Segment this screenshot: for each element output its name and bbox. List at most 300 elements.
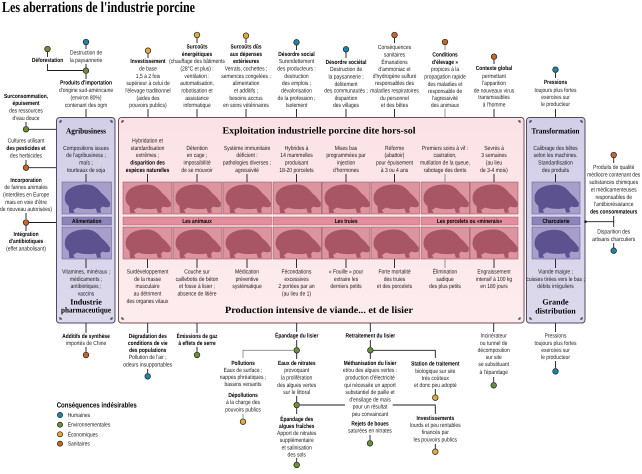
- illustration: pig, pharma: [62, 227, 112, 259]
- top: Contexte global: l'apparition: [482, 80, 506, 87]
- left: Surconsommation: épuisement: [12, 100, 40, 107]
- bottom: Investissements: Investissements: [416, 415, 455, 422]
- left: Intégration: d'antibiotiques: [9, 238, 44, 245]
- left: Incorporation: (interdites en Europe: [3, 192, 50, 198]
- top: Surcoûts dépenses extérieures: extérieures: [233, 58, 260, 65]
- right: Produits de qualité: Produits de qualité: [593, 164, 635, 171]
- pig row 2: [123, 227, 518, 259]
- top: Investissement: Investissement: [130, 58, 166, 65]
- top: Surcoûts énergétiques: ventilation :: [184, 73, 210, 80]
- bottom captions: Engraissement: [477, 268, 511, 276]
- top: Déforestation: Déforestation: [32, 57, 63, 64]
- bottom: Dégradation: des populations: [129, 347, 167, 354]
- panel: Exploitation industrielle: [118, 118, 524, 323]
- bottom: Eaux de nitrates: sur le littoral: [283, 389, 310, 396]
- top: Désordre sociétal: disparition: [335, 95, 357, 102]
- top: Désordre social: Surendettement: [279, 58, 315, 65]
- bottom: Épandage des algues: Apport de nitrates: [277, 430, 316, 437]
- bottom captions: des organes vitaux: [127, 298, 168, 305]
- bottom captions: absence de litière: [178, 290, 217, 298]
- bands: Les truies: [335, 218, 358, 225]
- bottom: Station de traitement: et donc peu adopté: [414, 382, 457, 389]
- top: Désordre social: de la profession ;: [278, 95, 316, 102]
- top: Surcoûts énergétiques: [169, 32, 225, 117]
- left: Incorporation: de nouveau autorisées): [0, 206, 52, 213]
- top: Contexte global: [474, 54, 514, 117]
- bottom: Méthanisation: et/ou des algues vertes :: [343, 367, 397, 374]
- top: Investissement: de base: [139, 66, 157, 72]
- bottom captions: caillebotis de béton: [176, 276, 218, 283]
- top captions: agressivité: [235, 167, 260, 174]
- bottom: Méthanisation: Méthanisation du lisier: [344, 360, 397, 367]
- top captions: en cage ;: [187, 153, 208, 159]
- heading: Exploitation: Exploitation industrielle porcine dite hors-sol: [222, 126, 416, 136]
- top captions: (abattoir): [385, 152, 404, 159]
- bottom: Pressions: toujours plus fortes: [534, 340, 577, 347]
- top captions: impossibilité: [183, 160, 211, 166]
- heading: Industrie pharmaceutique: pharmaceutique: [61, 306, 111, 314]
- text: viande maigre: Viande maigre ;: [538, 268, 573, 276]
- bottom: Dégradation: [123, 323, 172, 379]
- top captions: espèces naturelles: [126, 167, 170, 174]
- bottom: Méthanisation: substantiel de paille et: [345, 389, 395, 396]
- text: compositions: de l'agribusiness ;: [66, 152, 106, 159]
- text: viande maigre: débits irréguliers: [537, 283, 574, 290]
- bottom captions: intensif à 100 kg: [476, 276, 512, 283]
- panel: Transformation: [526, 118, 585, 323]
- top captions: (au lieu: [486, 160, 502, 166]
- bottom: Pollutions: [220, 360, 267, 425]
- top: Investissement: l'élevage traditionnel: [125, 88, 171, 94]
- right: Produits de qualité: des consommateurs: [590, 208, 638, 216]
- text: compositions: Compositions issues: [63, 145, 109, 152]
- top captions: mutilation de la queue,: [420, 160, 470, 166]
- top captions: standardisation: [131, 145, 164, 152]
- right: Produits de qualité: [584, 152, 640, 227]
- bands: [123, 217, 518, 225]
- bottom: Émissions: [177, 323, 217, 358]
- legend title: Conséquences indésirables: [57, 400, 137, 410]
- top: Conséquences sanitaires: maladies respiratoires: [370, 88, 419, 94]
- top: Désordre social: des producteurs :: [277, 66, 316, 72]
- top captions: à 3 ou 4 ans: [381, 167, 408, 174]
- text: calibrage: Standardisation: [538, 160, 573, 166]
- top captions: Hybrides à: [285, 145, 309, 152]
- top captions: de 3-4 mois): [480, 167, 508, 174]
- right: Produits de qualité: l'antibiorésistance: [594, 201, 634, 208]
- right: Disparition des artisans: artisans charcutiers: [592, 236, 635, 243]
- bottom: Émissions: Émissions de gaz: [177, 332, 217, 340]
- bottom: Retraitement du lisier: [346, 323, 435, 359]
- right: Produits de qualité: médiocre contenant des: [587, 172, 640, 178]
- top: Déforestation: [32, 46, 83, 70]
- bottom: Eaux de nitrates: provoquant: [284, 368, 309, 374]
- bottom captions: de la masse: [134, 276, 162, 283]
- bottom: Eaux de nitrates: la prolifération: [281, 374, 312, 382]
- illustration: pig, feed: [62, 182, 112, 214]
- bottom: Incinérateur: sur site: [486, 354, 502, 361]
- text: calibrage: des produits: [542, 167, 569, 174]
- right: Produits de qualité: responsables de: [595, 194, 633, 201]
- top: Investissement: [125, 48, 171, 117]
- top: Investissement: 1,5 à 2 fois: [136, 73, 160, 80]
- top: Surcoûts énergétiques: énergétiques: [182, 51, 213, 58]
- top: Désordre sociétal: Destruction de: [330, 66, 363, 73]
- heading: Industrie pharmaceutique: [61, 298, 111, 314]
- heading: Grande distribution: [535, 298, 576, 316]
- bottom: Pollutions: pouvoirs publics: [225, 406, 261, 414]
- right: Disparition des artisans: [592, 228, 635, 254]
- left: Intégration: Intégration: [13, 231, 39, 238]
- top: Produits d'importation: (environ 80%): [70, 94, 102, 102]
- top: Surcoûts dépenses extérieures: en soins vétérinaires: [223, 102, 269, 109]
- left: Intégration: (effet anabolisant): [6, 246, 46, 252]
- left: Surconsommation: d'eau douce: [13, 115, 40, 122]
- bottom: Méthanisation: saturées en nitrates: [348, 428, 392, 434]
- top captions: Réforme: [385, 145, 405, 152]
- bottom: Eaux de nitrates: des algues vertes: [277, 382, 316, 389]
- top captions: de se mouvoir: [181, 167, 213, 174]
- bottom: Eaux de nitrates: [277, 360, 345, 414]
- left: Incorporation: [0, 177, 56, 231]
- right: Produits de qualité: et médicamenteuses: [591, 186, 637, 194]
- text: calibrage: selon les machines.: [534, 152, 578, 159]
- top captions: injection: [337, 160, 355, 166]
- band: Alimentation: Alimentation: [72, 218, 102, 225]
- left: Intégration: [6, 231, 46, 252]
- bottom: Incinérateur: Incinérateur: [481, 332, 507, 340]
- bottom: Station de traitement: très coûteux: [422, 375, 449, 382]
- left: Surconsommation: des ressources: [9, 108, 43, 114]
- top: Destruction de la paysannerie: la paysannerie: [70, 57, 103, 64]
- bottom: Investissements: financés par: [422, 429, 449, 436]
- top: Conditions d'élevage: des maladies et: [428, 81, 463, 88]
- bands: Les porcelets ou «minerais»: [437, 218, 503, 225]
- top captions: 18-20 porcelets: [279, 167, 314, 174]
- top: Conséquences sanitaires: [370, 32, 419, 117]
- left: Incorporation: mais en voie d'être: [5, 199, 47, 206]
- bottom: Investissements: les pouvoirs publics: [414, 436, 457, 444]
- text: viande maigre: [526, 268, 585, 290]
- top: Pressions: toujours plus fortes: [534, 87, 577, 94]
- top: Pressions: le producteur: [541, 101, 570, 108]
- top: Produits d'importation: d'origine sud-américaine: [59, 87, 114, 94]
- text: viande maigre: cuisses tirées vers le bas ;: [526, 276, 585, 283]
- bottom: Épandage des algues: des sols: [288, 452, 306, 458]
- top: Destruction de la paysannerie: Destruction de: [70, 50, 103, 56]
- bottom captions: en 180 jours: [480, 283, 508, 290]
- top: Produits d'importation: [59, 68, 114, 117]
- bottom: Incinérateur: à l'épandage: [480, 369, 508, 376]
- top: Surcoûts énergétiques: informatique: [183, 102, 211, 109]
- bottom captions: extraire les: [334, 276, 358, 283]
- bottom: Station de traitement: biologique sur site: [415, 368, 456, 375]
- top: Conséquences sanitaires: responsables des: [375, 80, 414, 87]
- top: Pressions: [534, 67, 577, 117]
- top: Investissement: supérieur à celui de: [126, 80, 170, 87]
- bottom: Pollutions: bassins versants: [224, 381, 262, 388]
- bottom captions: préventive: [236, 276, 259, 283]
- band: Charcuterie: [532, 217, 580, 225]
- top captions: Détention: [186, 145, 208, 152]
- top: Contexte global: transmissibles: [478, 94, 510, 101]
- bottom captions: Fécondations: [282, 268, 311, 276]
- title: Les aberrations de l'industrie porcine: [2, 0, 195, 16]
- top: Désordre sociétal: des communautés ;: [324, 88, 368, 94]
- text: compositions: [63, 145, 109, 174]
- band: Alimentation: [62, 217, 112, 225]
- bottom: Incinérateur: [478, 323, 510, 388]
- top: Surcoûts énergétiques: robotisation et: [181, 88, 213, 94]
- bottom: Méthanisation: Rejets de boues: [351, 420, 389, 428]
- top: Conséquences sanitaires: Émanations: [381, 58, 408, 66]
- bottom: Méthanisation: qui nécessite un apport: [344, 382, 396, 389]
- top captions: Premiers soins à vif :: [422, 145, 468, 152]
- top: Conséquences sanitaires: sanitaires: [384, 52, 405, 58]
- bottom: Pressions: le producteur: [541, 354, 570, 361]
- bottom: Pollutions: Dépollutions: [228, 392, 258, 399]
- left: Cultures: Cultures utilisant: [8, 138, 45, 144]
- legend: Sanitaires: Sanitaires: [68, 441, 90, 448]
- top: Surcoûts dépenses extérieures: [221, 33, 271, 117]
- top captions: disparition des: [130, 160, 165, 166]
- bottom: Incinérateur: ou tunnel de: [480, 340, 508, 347]
- bottom: Épandage des algues: algues fraîches: [279, 423, 315, 430]
- top: Surcoûts dépenses extérieures: Surcoûts dûs: [231, 44, 262, 50]
- top: Pressions: Pressions: [544, 79, 568, 86]
- bands: Les animaux: [182, 218, 212, 225]
- bottom: Investissements: [393, 405, 461, 455]
- panel: Agribusiness: [56, 118, 115, 323]
- text: compositions: maïs ;: [79, 160, 93, 166]
- top: Conditions d'élevage: d'élevage »: [432, 59, 459, 66]
- top: Produits d'importation: Produits d'importation: [60, 80, 112, 86]
- top: Conséquences sanitaires: du personnel: [380, 95, 409, 102]
- bottom: Eaux de nitrates: Eaux de nitrates: [278, 360, 316, 367]
- top captions: Sevrés à: [484, 145, 504, 152]
- bottom captions: [127, 268, 512, 305]
- top captions: 3 semaines: [481, 152, 507, 159]
- top: Surcoûts dépenses extérieures: alimentation: [233, 80, 259, 87]
- bottom captions: derniers petits: [330, 283, 362, 290]
- top: Investissement: (aides des: [137, 95, 159, 102]
- bottom: Pollutions: nappes phréatiques ;: [220, 374, 267, 381]
- top: Désordre sociétal: la paysannerie ;: [328, 74, 364, 80]
- top: Surcoûts dépenses extérieures: Verrats, cochettes ;: [225, 66, 268, 72]
- bottom: Pollutions: à la charge des: [226, 399, 260, 406]
- text: pharma inputs: médicaments ;: [70, 276, 102, 283]
- top captions: produisant: [285, 160, 308, 166]
- top: Désordre sociétal: délitement: [335, 81, 358, 88]
- left: Surconsommation: Surconsommation,: [4, 93, 48, 100]
- top: Produits d'importation: contenant des ogm: [65, 102, 107, 109]
- text: pharma inputs: [62, 268, 110, 298]
- top: Surcoûts dépenses extérieures: et additifs ;: [234, 88, 258, 94]
- pig row 1: [123, 182, 518, 214]
- bottom captions: des truies: [384, 276, 405, 283]
- top: Désordre social: des emplois ;: [282, 80, 311, 87]
- text: pharma inputs: antibiotiques ;: [71, 283, 102, 290]
- top: Surcoûts énergétiques: assistance: [185, 95, 209, 102]
- illustration: pig, retail: [532, 227, 580, 259]
- top captions: [126, 138, 508, 174]
- bottom captions: Forte mortalité: [379, 268, 411, 276]
- bottom: Pressions: Pressions: [545, 332, 566, 340]
- bottom: Additifs: Additifs de synthèse: [62, 333, 110, 340]
- top: Investissement: pouvoirs publics): [129, 102, 167, 109]
- bottom: Dégradation: odeurs insupportables: [123, 362, 172, 368]
- left: Cultures: des herbicides: [10, 152, 42, 160]
- top: Conséquences sanitaires: et des bêtes: [381, 102, 408, 109]
- bottom captions: au détriment: [134, 290, 162, 298]
- bottom captions: Élimination: [433, 268, 457, 276]
- right: Produits de qualité: substances chimiques: [589, 179, 638, 186]
- top captions: programmées par: [326, 152, 366, 159]
- bottom: Épandage du lisier: Épandage du lisier: [275, 332, 319, 340]
- top: Conditions d'élevage: [424, 39, 466, 117]
- bottom: Investissements: lourds et peu rentables: [410, 422, 461, 429]
- legend: Économiques: Économiques: [68, 430, 98, 438]
- top captions: Système immunitaire: [224, 145, 271, 152]
- top: Désordre sociétal: [324, 46, 368, 117]
- top: Désordre social: [277, 40, 316, 117]
- bottom: Épandage des algues: supplémentaire: [280, 437, 314, 444]
- bottom captions: « Fouille » pour: [329, 268, 363, 276]
- top: Conditions d'élevage: Conditions: [432, 52, 458, 58]
- left: Cultures: [6, 138, 56, 170]
- bottom captions: Couche sur: [184, 268, 210, 276]
- top: Conditions d'élevage: propagation rapide: [424, 74, 466, 80]
- bottom: Épandage des algues: [277, 415, 316, 468]
- top captions: pathologies diverses ;: [223, 160, 271, 166]
- bottom: Station de traitement: [411, 360, 459, 401]
- bottom captions: excessives: [284, 276, 309, 283]
- bottom: Additifs: [62, 323, 110, 358]
- legend: Humaines: Humaines: [68, 412, 90, 419]
- top: Conditions d'élevage: propices à la: [431, 66, 460, 73]
- top: Surcoûts énergétiques: automatisation,: [180, 80, 214, 87]
- top: Surcoûts énergétiques: Surcoûts: [187, 44, 208, 50]
- top: Conséquences sanitaires: d'hydrogène sulfuré: [373, 73, 417, 80]
- top captions: pour épuisement: [376, 160, 413, 166]
- top: Conditions d'élevage: l'agressivité: [432, 95, 459, 102]
- top: Surcoûts énergétiques: (28°C et plus) :: [180, 66, 214, 72]
- top: Conditions d'élevage: des animaux: [431, 102, 459, 109]
- text: pharma inputs: vaccins: [78, 290, 94, 298]
- legend: Environnementales: Environnementales: [68, 422, 110, 429]
- top captions: extrêmes ;: [136, 152, 159, 159]
- bottom: Pressions: [534, 323, 577, 374]
- top: Contexte global: permettant: [482, 74, 506, 80]
- bottom captions: et fosse à lisier ;: [179, 283, 215, 290]
- bottom captions: et des porcelets: [377, 283, 412, 290]
- heading: Agribusiness: Agribusiness: [66, 126, 106, 136]
- top: Désordre social: dévalorisation: [281, 88, 312, 94]
- top: Désordre sociétal: des villages: [333, 102, 359, 109]
- band: Charcuterie: Charcuterie: [543, 218, 570, 225]
- bottom: Méthanisation: [343, 360, 397, 446]
- bottom: Méthanisation: d'ensilage de maïs: [349, 396, 391, 404]
- bottom: Dégradation: Dégradation des: [129, 333, 167, 340]
- top: Conséquences sanitaires: Conséquences: [378, 44, 411, 51]
- bottom captions: sadique: [436, 276, 454, 283]
- legend: [57, 400, 137, 448]
- bottom: Méthanisation: peu convaincant: [352, 411, 388, 418]
- bottom: Incinérateur: se substituant: [478, 361, 509, 368]
- left: Cultures: des pesticides et: [6, 145, 46, 152]
- bottom: Pressions: exercées sur: [541, 347, 570, 354]
- top captions: Mises bas: [335, 145, 357, 152]
- heading: Industrie pharmaceutique: Industrie: [70, 298, 102, 306]
- left: Incorporation: de farines animales: [4, 184, 48, 191]
- top: Destruction de la paysannerie: [70, 39, 103, 68]
- heading: Production intensive: Production intensive de viande... et de lisier: [225, 306, 414, 316]
- bottom captions: musculaire: [136, 283, 160, 290]
- top: Surcoûts dépenses extérieures: semences congelées ;: [221, 73, 271, 80]
- bottom: Méthanisation: pour un résultat: [353, 404, 388, 410]
- bottom: Pollutions: Pollutions: [231, 360, 255, 367]
- heading: Grande distribution: Grande: [542, 298, 569, 306]
- top: Conditions d'élevage: responsable de: [428, 88, 463, 95]
- text: pharma inputs: Vitamines, minéraux ;: [62, 268, 110, 276]
- bottom: Dégradation: Pollution de l'air ;: [129, 354, 167, 361]
- top: Surcoûts énergétiques: (chauffage des bâtiments: [169, 58, 225, 65]
- bottom captions: (au lieu de 1): [282, 290, 311, 298]
- bottom: Pollutions: Eaux de surface ;: [224, 367, 263, 374]
- top: Désordre social: destruction: [284, 73, 309, 80]
- bottom captions: systématique: [232, 283, 262, 290]
- bottom: Additifs: importés de Chine: [66, 340, 107, 347]
- top captions: 14 mammelles: [280, 152, 313, 159]
- bottom: Émissions: à effets de serre: [178, 340, 216, 347]
- bottom: Incinérateur: décomposition: [478, 347, 510, 354]
- top: Conséquences sanitaires: d'ammoniac et: [378, 66, 411, 73]
- bottom: Épandage du lisier: [243, 323, 319, 359]
- top captions: d'hormones: [333, 167, 359, 174]
- bottom captions: Médication: [235, 268, 259, 276]
- top: Désordre social: Désordre social: [278, 51, 315, 58]
- heading: Transformation: Transformation: [532, 126, 580, 136]
- text: compositions: tourteaux de soja: [67, 167, 106, 174]
- bottom: Épandage des algues: et salinisation: [282, 444, 312, 452]
- text: calibrage: Calibrage des bêtes: [533, 145, 578, 152]
- top: Surcoûts dépenses extérieures: aux dépenses: [230, 51, 263, 58]
- bottom captions: des plus petits: [429, 283, 461, 290]
- top: Désordre sociétal: Désordre sociétal: [326, 59, 367, 66]
- bottom captions: Surdéveloppement: [127, 268, 169, 276]
- top: Contexte global: Contexte global: [476, 65, 513, 72]
- top: Contexte global: de nouveaux virus: [474, 88, 514, 94]
- left: Surconsommation: [4, 93, 56, 132]
- bottom: Dégradation: conditions de vie: [128, 340, 168, 347]
- right: Disparition des artisans: Disparition des: [597, 228, 630, 236]
- top: Contexte global: à l'homme: [483, 102, 506, 108]
- top captions: rabotage des dents: [424, 167, 466, 174]
- bottom: Méthanisation: production d'électricité: [345, 374, 395, 382]
- bottom: Retraitement du lisier: Retraitement du lisier: [346, 332, 396, 340]
- bottom: Épandage des algues: Épandage des: [280, 415, 314, 423]
- top: Désordre social: Isolement: [286, 102, 308, 109]
- top captions: castration,: [434, 152, 457, 159]
- top: Pressions: exercées sur: [541, 94, 570, 101]
- bottom: Station de traitement: Station de traitement: [411, 360, 459, 368]
- heading: Grande distribution: distribution: [535, 306, 576, 316]
- illustration: pig, processing: [532, 182, 580, 214]
- bottom captions: 2 portées par an: [278, 283, 315, 290]
- top captions: déficient :: [236, 152, 258, 159]
- left: Incorporation: Incorporation: [10, 177, 42, 184]
- top captions: Hybridation et: [132, 138, 163, 144]
